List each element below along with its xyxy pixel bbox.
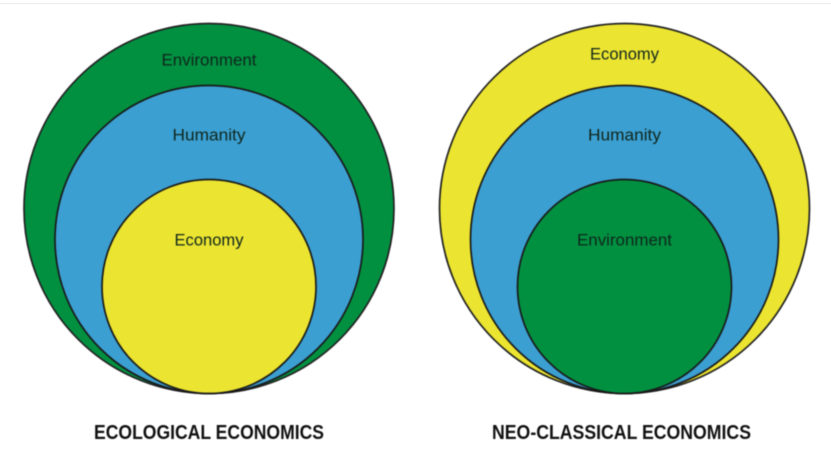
label: humanity: Humanity [172, 126, 246, 144]
circle: environment [518, 180, 732, 394]
label: economy: Economy [590, 44, 659, 64]
label: humanity: Humanity [588, 126, 661, 144]
label: economy: Economy [174, 230, 244, 250]
title: ecological economics: ECOLOGICAL ECONOMICS [94, 422, 324, 444]
circle: economy [102, 180, 316, 394]
label: environment: Environment [162, 50, 257, 70]
title: neo-classical economics: NEO-CLASSICAL ECONOMICS [492, 422, 751, 444]
diagram: neo-classical economics [440, 24, 810, 394]
circle: environment [24, 24, 394, 394]
circle: humanity [55, 86, 363, 394]
label: environment: Environment [577, 230, 672, 250]
circle: economy [440, 24, 810, 394]
diagram: ecological economics [24, 24, 394, 394]
circle: humanity [470, 86, 778, 394]
